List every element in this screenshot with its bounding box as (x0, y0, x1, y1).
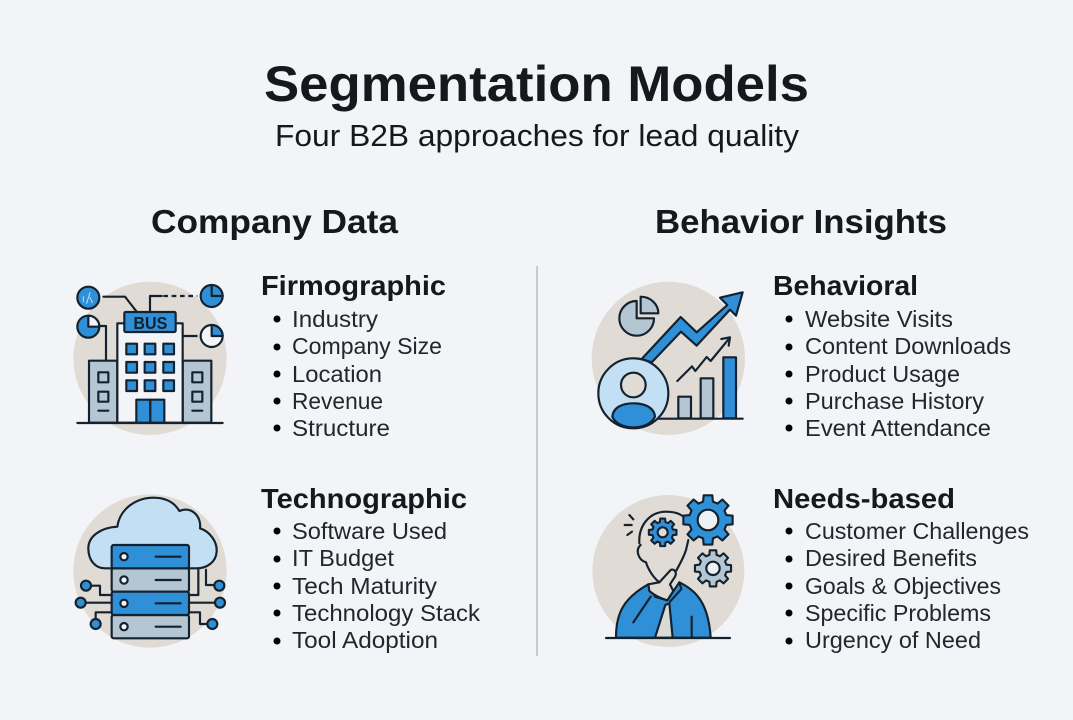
list: Technographic attributes: Tool Adoption (292, 627, 438, 653)
list: Needs-based attributes: Customer Challenges (805, 518, 1029, 544)
list: Firmographic attributes: Structure (292, 415, 390, 441)
list: Behavioral attributes: Purchase History (805, 388, 985, 414)
label: Technographic: Technographic (261, 483, 467, 514)
list: Needs-based attributes: Urgency of Need (805, 627, 981, 653)
label: Firmographic: Firmographic (261, 270, 446, 301)
list: Technographic attributes: Technology Stack (292, 600, 481, 626)
list: Technographic attributes: Software Used (292, 518, 447, 544)
list: Behavioral attributes: Product Usage (805, 361, 960, 387)
list: Behavioral attributes: Website Visits (805, 306, 953, 332)
icon: thinking person with gears (592, 495, 744, 647)
subtitle: Four B2B approaches for lead quality (275, 118, 800, 153)
icon: cloud server rack (73, 494, 227, 648)
panel: Behavioral (592, 270, 1011, 441)
list: Behavioral attributes: Content Downloads (805, 333, 1011, 359)
title: Segmentation Models (264, 56, 809, 112)
list: Firmographic attributes (274, 306, 442, 441)
heading: Company Data: Company Data (151, 203, 399, 240)
list: Firmographic attributes: Location (292, 361, 382, 387)
list: Firmographic attributes: Revenue (292, 388, 383, 414)
list: Needs-based attributes: Specific Problems (805, 600, 991, 626)
icon: office building with pie charts (73, 282, 227, 435)
panel: Needs-based (592, 483, 1029, 653)
label: Behavioral: Behavioral (773, 270, 918, 301)
list: Behavioral attributes: Event Attendance (805, 415, 991, 441)
icon: user with growth charts (592, 282, 745, 435)
list: Needs-based attributes: Goals & Objectives (805, 573, 1001, 599)
list: Technographic attributes: IT Budget (292, 545, 395, 571)
list: Technographic attributes: Tech Maturity (292, 573, 438, 599)
panel: Firmographic (73, 270, 446, 441)
list: Needs-based attributes: Desired Benefits (805, 545, 977, 571)
label: Needs-based: Needs-based (773, 483, 955, 514)
list: Firmographic attributes: Industry (292, 306, 379, 332)
heading: Behavior Insights: Behavior Insights (655, 203, 947, 240)
list: Firmographic attributes: Company Size (292, 333, 442, 359)
list: Needs-based attributes (786, 518, 1029, 653)
list: Technographic attributes (274, 518, 481, 653)
icon: office building with pie charts: BUS (133, 313, 167, 333)
list: Behavioral attributes (786, 306, 1011, 441)
panel: Technographic (73, 483, 481, 653)
